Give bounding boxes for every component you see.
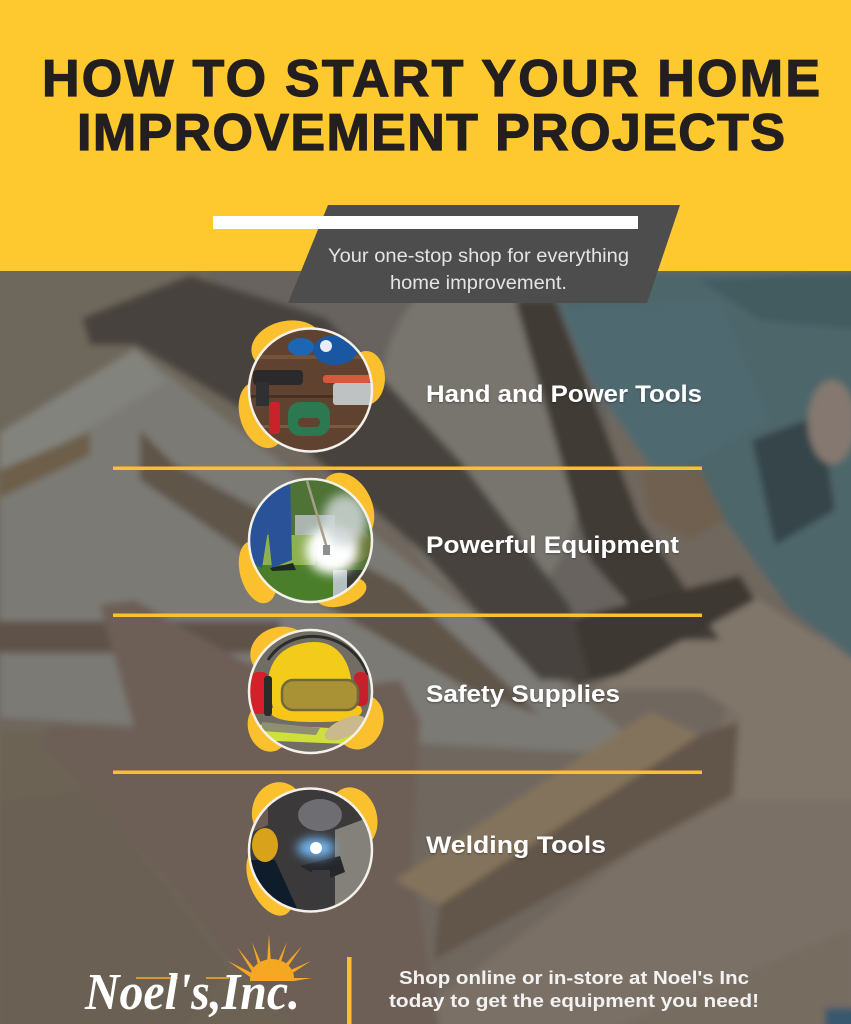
item: powerful equipment [238, 472, 679, 608]
call to action text: Shop online or in-store at Noel's Inc [399, 968, 749, 988]
item: safety supplies [242, 620, 620, 760]
background photo: circular saw cutting a board [0, 260, 851, 1024]
subtitle text: home improvement. [390, 272, 567, 294]
photo: pressure washer on lawn [250, 480, 371, 601]
label: Hand and Power Tools [426, 381, 702, 408]
divider lines [113, 466, 702, 774]
photo: hard hat, ear muffs and goggles [250, 632, 370, 752]
yellow header band [0, 0, 851, 271]
subtitle text [328, 245, 629, 294]
icon blobs: yellow [242, 620, 391, 756]
white accent bar [213, 216, 638, 229]
title [42, 50, 820, 162]
call to action text: today to get the equipment you need! [389, 991, 759, 1011]
circle frame [249, 328, 372, 452]
icon blobs: yellow [237, 778, 384, 923]
photo: welder sparks [250, 790, 371, 910]
call to action text [389, 968, 759, 1011]
circle frame [249, 479, 372, 602]
logo: Noel's, Inc. [84, 934, 312, 1021]
title: HOW TO START YOUR HOME [42, 50, 820, 108]
title: IMPROVEMENT PROJECTS [77, 104, 785, 162]
vertical divider [347, 957, 352, 1024]
logo: Noel's, Inc.: Noel's,Inc. [84, 964, 300, 1021]
subtitle ribbon [213, 205, 680, 303]
item: welding tools [246, 782, 606, 916]
item: hand and power tools [231, 314, 702, 455]
icon blobs: yellow [231, 314, 385, 454]
circle frame [249, 630, 372, 753]
photo: power tools on wood [250, 330, 371, 450]
label: Safety Supplies [426, 681, 620, 708]
subtitle text: Your one-stop shop for everything [328, 245, 629, 267]
label: Welding Tools [426, 832, 606, 859]
label: Powerful Equipment [426, 532, 679, 559]
icon: sun rays [228, 934, 312, 981]
circle frame [249, 788, 372, 912]
orange dashes [136, 977, 229, 979]
icon blobs: yellow [232, 464, 385, 612]
